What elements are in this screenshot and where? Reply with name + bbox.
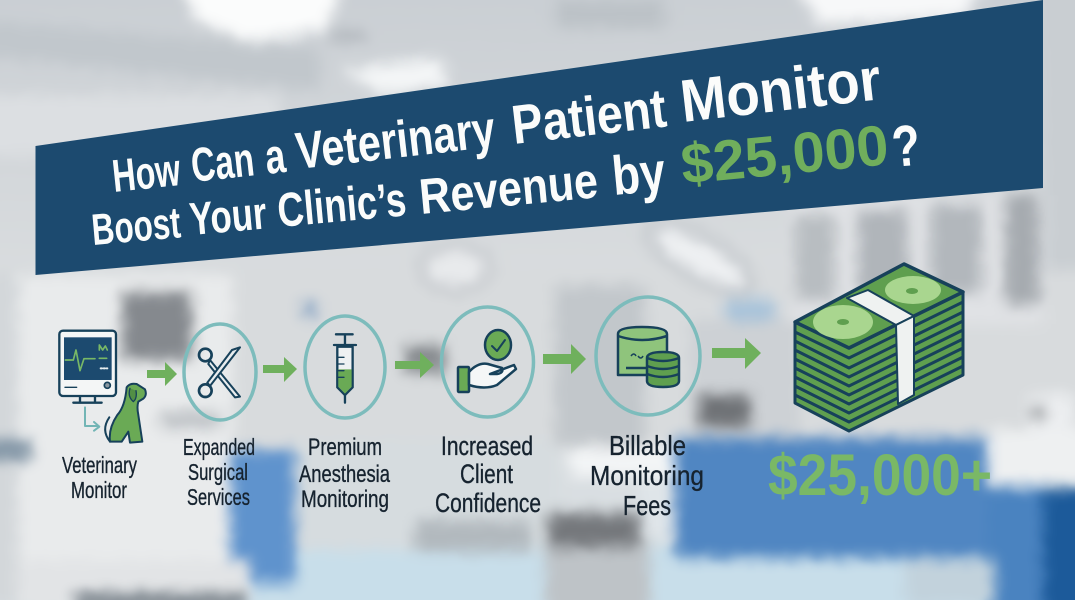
- label: Premium Anesthesia Monitoring: [299, 434, 390, 513]
- title line 1: a: [262, 129, 289, 185]
- title line 1: Monitor: [677, 45, 884, 135]
- title line 1: Can: [188, 133, 257, 193]
- label: Billable Monitoring Fees: Monitoring: [590, 460, 704, 491]
- label: Expanded Surgical Services: Surgical: [188, 459, 248, 485]
- label: Premium Anesthesia Monitoring: Premium: [308, 434, 382, 461]
- label: Veterinary Monitor: Monitor: [71, 477, 127, 503]
- label: Increased Client Confidence: Increased: [441, 431, 533, 461]
- title line 2: $25,000: [678, 113, 891, 197]
- title line 2: [90, 113, 923, 255]
- label: Increased Client Confidence: Confidence: [435, 488, 541, 518]
- label: Billable Monitoring Fees: Billable: [609, 430, 686, 461]
- label: Expanded Surgical Services: Services: [187, 484, 250, 510]
- arrow 1: [147, 362, 177, 386]
- label: Expanded Surgical Services: Expanded: [183, 434, 255, 460]
- label: Premium Anesthesia Monitoring: Monitoring: [301, 486, 389, 513]
- title line 1: [110, 45, 884, 202]
- label: Increased Client Confidence: Client: [460, 459, 513, 489]
- lower room: [0, 270, 1075, 450]
- title line 2: ?: [889, 113, 923, 180]
- title line 1: Veterinary: [293, 101, 498, 181]
- icon: hand with check in ring: [442, 307, 534, 417]
- title line 2: Your: [187, 186, 269, 245]
- title line 1: How: [110, 143, 183, 202]
- label: Premium Anesthesia Monitoring: Anesthesia: [299, 461, 390, 488]
- label: Veterinary Monitor: Veterinary: [62, 452, 137, 478]
- label: Veterinary Monitor: [62, 452, 137, 503]
- title line 2: Boost: [90, 198, 183, 255]
- arrow 2: [263, 357, 297, 382]
- total: $25,000+: $25,000+: [768, 443, 992, 508]
- title line 2: Clinic’s: [275, 173, 408, 238]
- arrow 4: [543, 344, 586, 374]
- icon: stack of cash: [795, 264, 963, 431]
- title line 2: by: [609, 140, 668, 207]
- icon: scissors in ring: [184, 324, 256, 420]
- title line 2: Revenue: [417, 152, 600, 225]
- floor: [230, 545, 1075, 600]
- arrow 5: [712, 338, 761, 369]
- icon: syringe in ring: [305, 316, 385, 418]
- icon: veterinary monitor and dog: [59, 331, 146, 443]
- label: Billable Monitoring Fees: [590, 430, 704, 521]
- title line 1: Patient: [508, 77, 669, 156]
- arrow 3: [395, 352, 434, 378]
- label: Increased Client Confidence: [435, 431, 541, 518]
- blue cabinets: [230, 450, 295, 583]
- title banner: [36, 0, 1043, 275]
- label: Billable Monitoring Fees: Fees: [623, 490, 671, 521]
- label: Expanded Surgical Services: [183, 434, 255, 510]
- icon: billing database in ring: [596, 297, 700, 415]
